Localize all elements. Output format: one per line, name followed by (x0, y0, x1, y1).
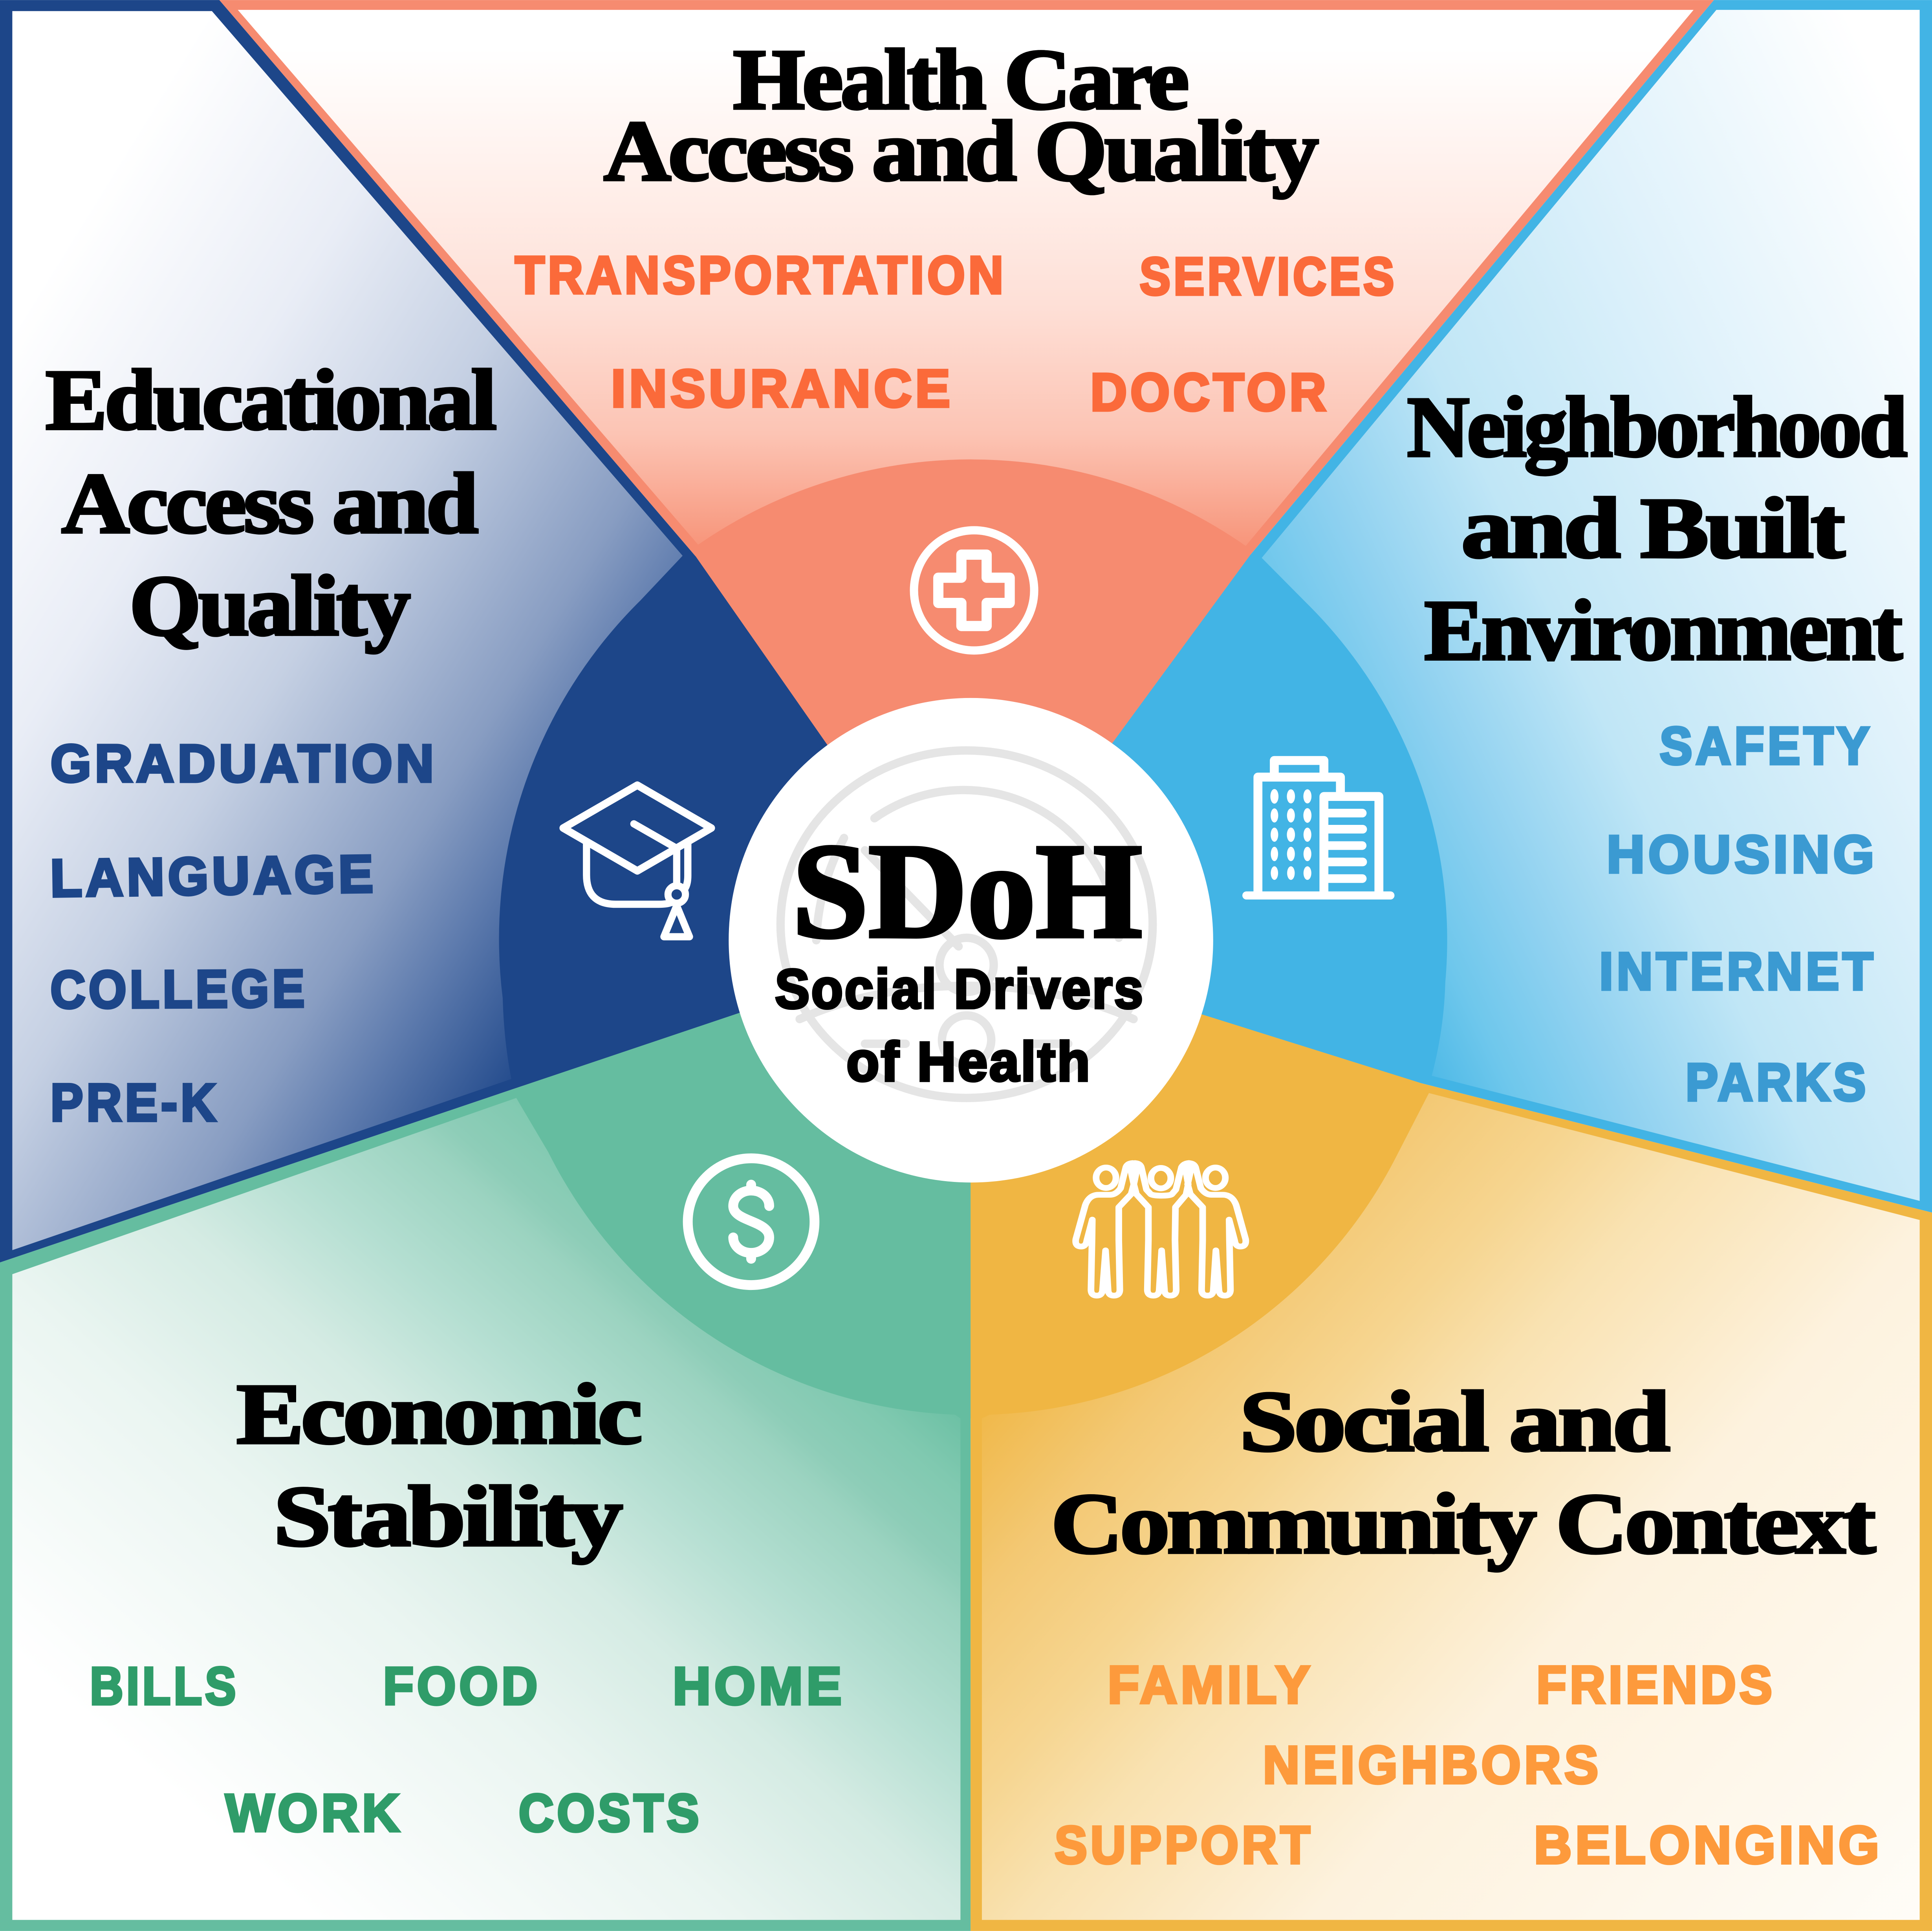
wedge: social (971, 1012, 1429, 1418)
icon: group of people (1076, 1163, 1246, 1295)
labels: social (1055, 1655, 1883, 1874)
panel background: neighborhood (1262, 10, 1920, 1201)
heading: education: Educational (46, 352, 495, 448)
heading: economic: Stability (273, 1469, 622, 1564)
labels: neighborhood: SAFETY (1660, 716, 1873, 775)
panel background: social (982, 1093, 1920, 1920)
labels: neighborhood: PARKS (1686, 1053, 1869, 1112)
labels: education: PRE-K (51, 1073, 219, 1132)
icon: medical cross (914, 530, 1034, 650)
heading: education: Quality (129, 558, 410, 654)
heading: education (46, 352, 495, 654)
center disc (729, 698, 1213, 1182)
wedge: economic (516, 1011, 971, 1418)
subtitle: social drivers of health: of Health (846, 1030, 1091, 1092)
heading: neighborhood (1407, 379, 1906, 678)
labels: education: COLLEGE (50, 959, 308, 1019)
labels: health care: SERVICES (1140, 247, 1397, 306)
heading: health care: Access and Quality (604, 103, 1318, 199)
icon: dollar coin (688, 1158, 815, 1285)
panel border: social (971, 1012, 1932, 1931)
icon: buildings (1246, 760, 1390, 896)
labels: education: GRADUATION (51, 734, 438, 793)
panel border: neighborhood (1108, 0, 1932, 1213)
heading: neighborhood: Neighborhood (1407, 379, 1906, 475)
labels: neighborhood (1599, 716, 1878, 1112)
title: SDoH: SDoH (792, 815, 1142, 966)
panel border: economic (0, 1011, 971, 1931)
heading: social: Community Context (1051, 1476, 1876, 1572)
panel: educational access and quality (0, 0, 833, 1262)
labels: health care: DOCTOR (1090, 363, 1330, 422)
labels: health care (515, 245, 1397, 422)
labels: economic: WORK (225, 1783, 403, 1843)
labels: economic: BILLS (90, 1656, 239, 1716)
watermark icon (780, 751, 1153, 1098)
panel border: health care (219, 0, 1714, 753)
heading: neighborhood: Environment (1425, 583, 1903, 678)
heading: health care (604, 32, 1318, 199)
wedge: education (499, 556, 833, 1086)
heading: health care: Health Care (733, 32, 1187, 127)
labels: social: BELONGING (1534, 1815, 1883, 1874)
heading: economic: Economic (236, 1367, 640, 1462)
panel: health care access and quality (219, 0, 1714, 753)
heading: social (1051, 1374, 1876, 1572)
wedge: health care (696, 460, 1251, 753)
panel background: health care (238, 10, 1694, 546)
subtitle: social drivers of health (775, 958, 1145, 1092)
heading: social: Social and (1240, 1374, 1669, 1469)
labels: neighborhood: HOUSING (1607, 824, 1878, 884)
labels: social: SUPPORT (1055, 1815, 1313, 1874)
labels: economic: HOME (673, 1656, 845, 1716)
panel: social and community context (971, 1012, 1932, 1931)
panel background: education (12, 11, 683, 1250)
labels: health care: TRANSPORTATION (515, 245, 1007, 305)
heading: education: Access and (62, 456, 477, 551)
labels: education: LANGUAGE (50, 844, 377, 908)
labels: health care: INSURANCE (611, 359, 954, 418)
wedge: neighborhood (1108, 555, 1447, 1083)
panel border: education (0, 0, 833, 1262)
icon: graduation cap (563, 785, 711, 937)
labels: economic: FOOD (383, 1656, 541, 1716)
labels: social: FAMILY (1108, 1655, 1313, 1715)
heading: neighborhood: and Built (1461, 480, 1845, 576)
labels: neighborhood: INTERNET (1599, 942, 1877, 1001)
labels: economic: COSTS (519, 1783, 702, 1843)
labels: social: FRIENDS (1536, 1655, 1776, 1715)
center circle (729, 698, 1213, 1182)
labels: social: NEIGHBORS (1263, 1735, 1602, 1794)
labels: economic (90, 1656, 845, 1843)
panel: neighborhood and built environment (1108, 0, 1932, 1213)
heading: economic (236, 1367, 640, 1564)
labels: education (50, 734, 438, 1132)
panel: economic stability (0, 1011, 971, 1931)
panel background: economic (12, 1098, 960, 1920)
subtitle: social drivers of health: Social Drivers (775, 958, 1145, 1020)
